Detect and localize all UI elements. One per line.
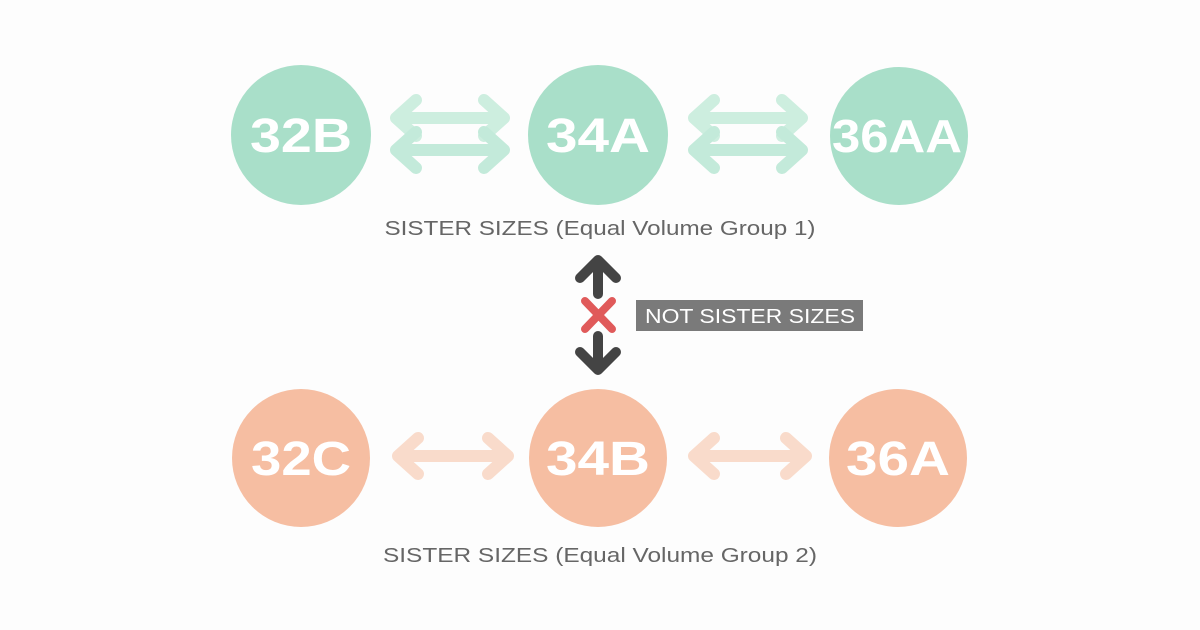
circle 36AA: 36AA — [832, 110, 962, 162]
circle 34B — [529, 389, 667, 527]
arrow 32C-34B — [398, 438, 508, 474]
arrow 34B-36A — [694, 438, 806, 474]
circle 36A: 36A — [846, 433, 950, 486]
circle 34A — [528, 65, 668, 205]
group 1: green sister sizes — [231, 65, 968, 205]
arrows 32B-34A — [396, 100, 504, 168]
circle 32C — [232, 389, 370, 527]
label: not sister sizes: NOT SISTER SIZES — [645, 306, 855, 328]
circle 36AA — [830, 67, 968, 205]
circle 34A: 34A — [546, 110, 650, 163]
circle 32B — [231, 65, 371, 205]
caption group 1: SISTER SIZES (Equal Volume Group 1) — [384, 218, 816, 240]
group 2: peach sister sizes — [232, 389, 967, 527]
circle 34B: 34B — [546, 433, 650, 486]
circle 32B: 32B — [250, 110, 352, 163]
icon: vertical arrows with red X — [580, 260, 616, 370]
arrows 34A-36AA — [694, 100, 802, 168]
circle 36A — [829, 389, 967, 527]
caption group 2: SISTER SIZES (Equal Volume Group 2) — [383, 545, 817, 567]
circle 32C: 32C — [251, 433, 351, 486]
label: not sister sizes — [636, 300, 863, 331]
